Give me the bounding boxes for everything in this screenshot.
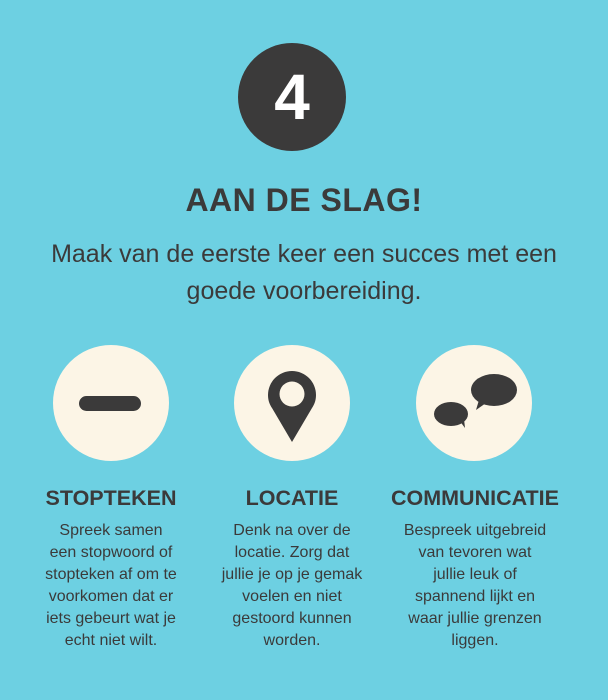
subtitle: Maak van de eerste keer een succes met een goede voorbereiding. (51, 240, 557, 305)
column: stopteken: STOPTEKEN (45, 486, 176, 510)
column: locatie: LOCATIE (246, 486, 338, 510)
column: stopteken: echt niet wilt. (65, 632, 157, 649)
badge: number 4 (238, 43, 346, 151)
column: stopteken: een stopwoord of (50, 544, 172, 561)
column: stopteken: voorkomen dat er (49, 588, 173, 605)
column: locatie: worden. (264, 632, 320, 649)
column: locatie: locatie. Zorg dat (235, 544, 349, 561)
badge: number 4: 4 (274, 61, 310, 133)
column: communicatie: van tevoren wat (419, 544, 531, 561)
column: communicatie (391, 486, 559, 649)
icon: stop dash (53, 345, 169, 461)
column: locatie (221, 486, 362, 649)
column: locatie: voelen en niet (242, 588, 342, 605)
column: stopteken: stopteken af om te (45, 566, 177, 583)
column: stopteken (45, 486, 177, 649)
column: communicatie: liggen. (451, 632, 499, 649)
column: locatie: gestoord kunnen (232, 610, 352, 627)
column: locatie: jullie je op je gemak (222, 566, 362, 583)
column: stopteken: iets gebeurt wat je (46, 610, 176, 627)
column: communicatie: spannend lijkt en (415, 588, 535, 605)
column: locatie: Denk na over de (233, 522, 351, 539)
column: stopteken: Spreek samen (59, 522, 163, 539)
icon: speech bubbles (416, 345, 532, 461)
icon: location pin (234, 345, 350, 461)
title: AAN DE SLAG! (185, 182, 423, 218)
column: communicatie: waar jullie grenzen (408, 610, 542, 627)
column: communicatie: COMMUNICATIE (391, 486, 559, 510)
column: communicatie: Bespreek uitgebreid (404, 522, 546, 539)
column: communicatie: jullie leuk of (433, 566, 517, 583)
